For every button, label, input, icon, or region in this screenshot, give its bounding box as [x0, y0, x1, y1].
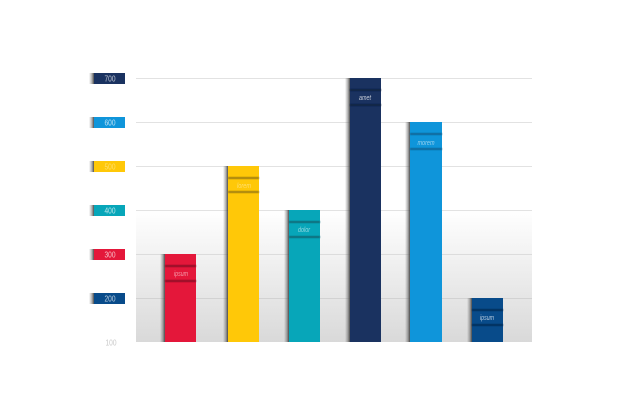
- bar: amet navy 700: [345, 78, 381, 342]
- y-axis label: 100: 100: [106, 338, 117, 348]
- bar: ipsum red 300: ipsum: [174, 271, 188, 278]
- bar: morem blue 600: morem: [418, 140, 435, 147]
- bar: dolor teal 400: [284, 210, 320, 342]
- bar: ipsum red 300: [160, 254, 196, 342]
- y-axis tab: 600: 600: [104, 118, 116, 128]
- y-axis tab: 400: 400: [104, 206, 116, 216]
- y-axis tab: 700: 700: [104, 74, 116, 84]
- y-axis tab: 200: [89, 293, 125, 304]
- grid lines: [136, 78, 532, 298]
- bar: dolor teal 400: dolor: [298, 227, 311, 234]
- y-axis tab: 700: [89, 73, 125, 84]
- y-axis tab: 500: 500: [104, 162, 116, 172]
- bar: morem blue 600: [405, 122, 442, 342]
- bar: ipsum dark blue 200: [467, 298, 503, 342]
- bar: amet navy 700: amet: [359, 95, 372, 102]
- bar: ipsum dark blue 200: ipsum: [480, 315, 494, 322]
- y-axis tab: 500: [89, 161, 125, 172]
- y-axis tab: 400: [89, 205, 125, 216]
- bar: lorem yellow 500: [223, 166, 259, 342]
- y-axis tab: 600: [89, 117, 125, 128]
- chart background gradient: [136, 210, 532, 342]
- y-axis tab: 300: 300: [104, 250, 116, 260]
- bar: lorem yellow 500: lorem: [237, 183, 251, 190]
- y-axis tab: 200: 200: [104, 294, 116, 304]
- y-axis tab: 300: [89, 249, 125, 260]
